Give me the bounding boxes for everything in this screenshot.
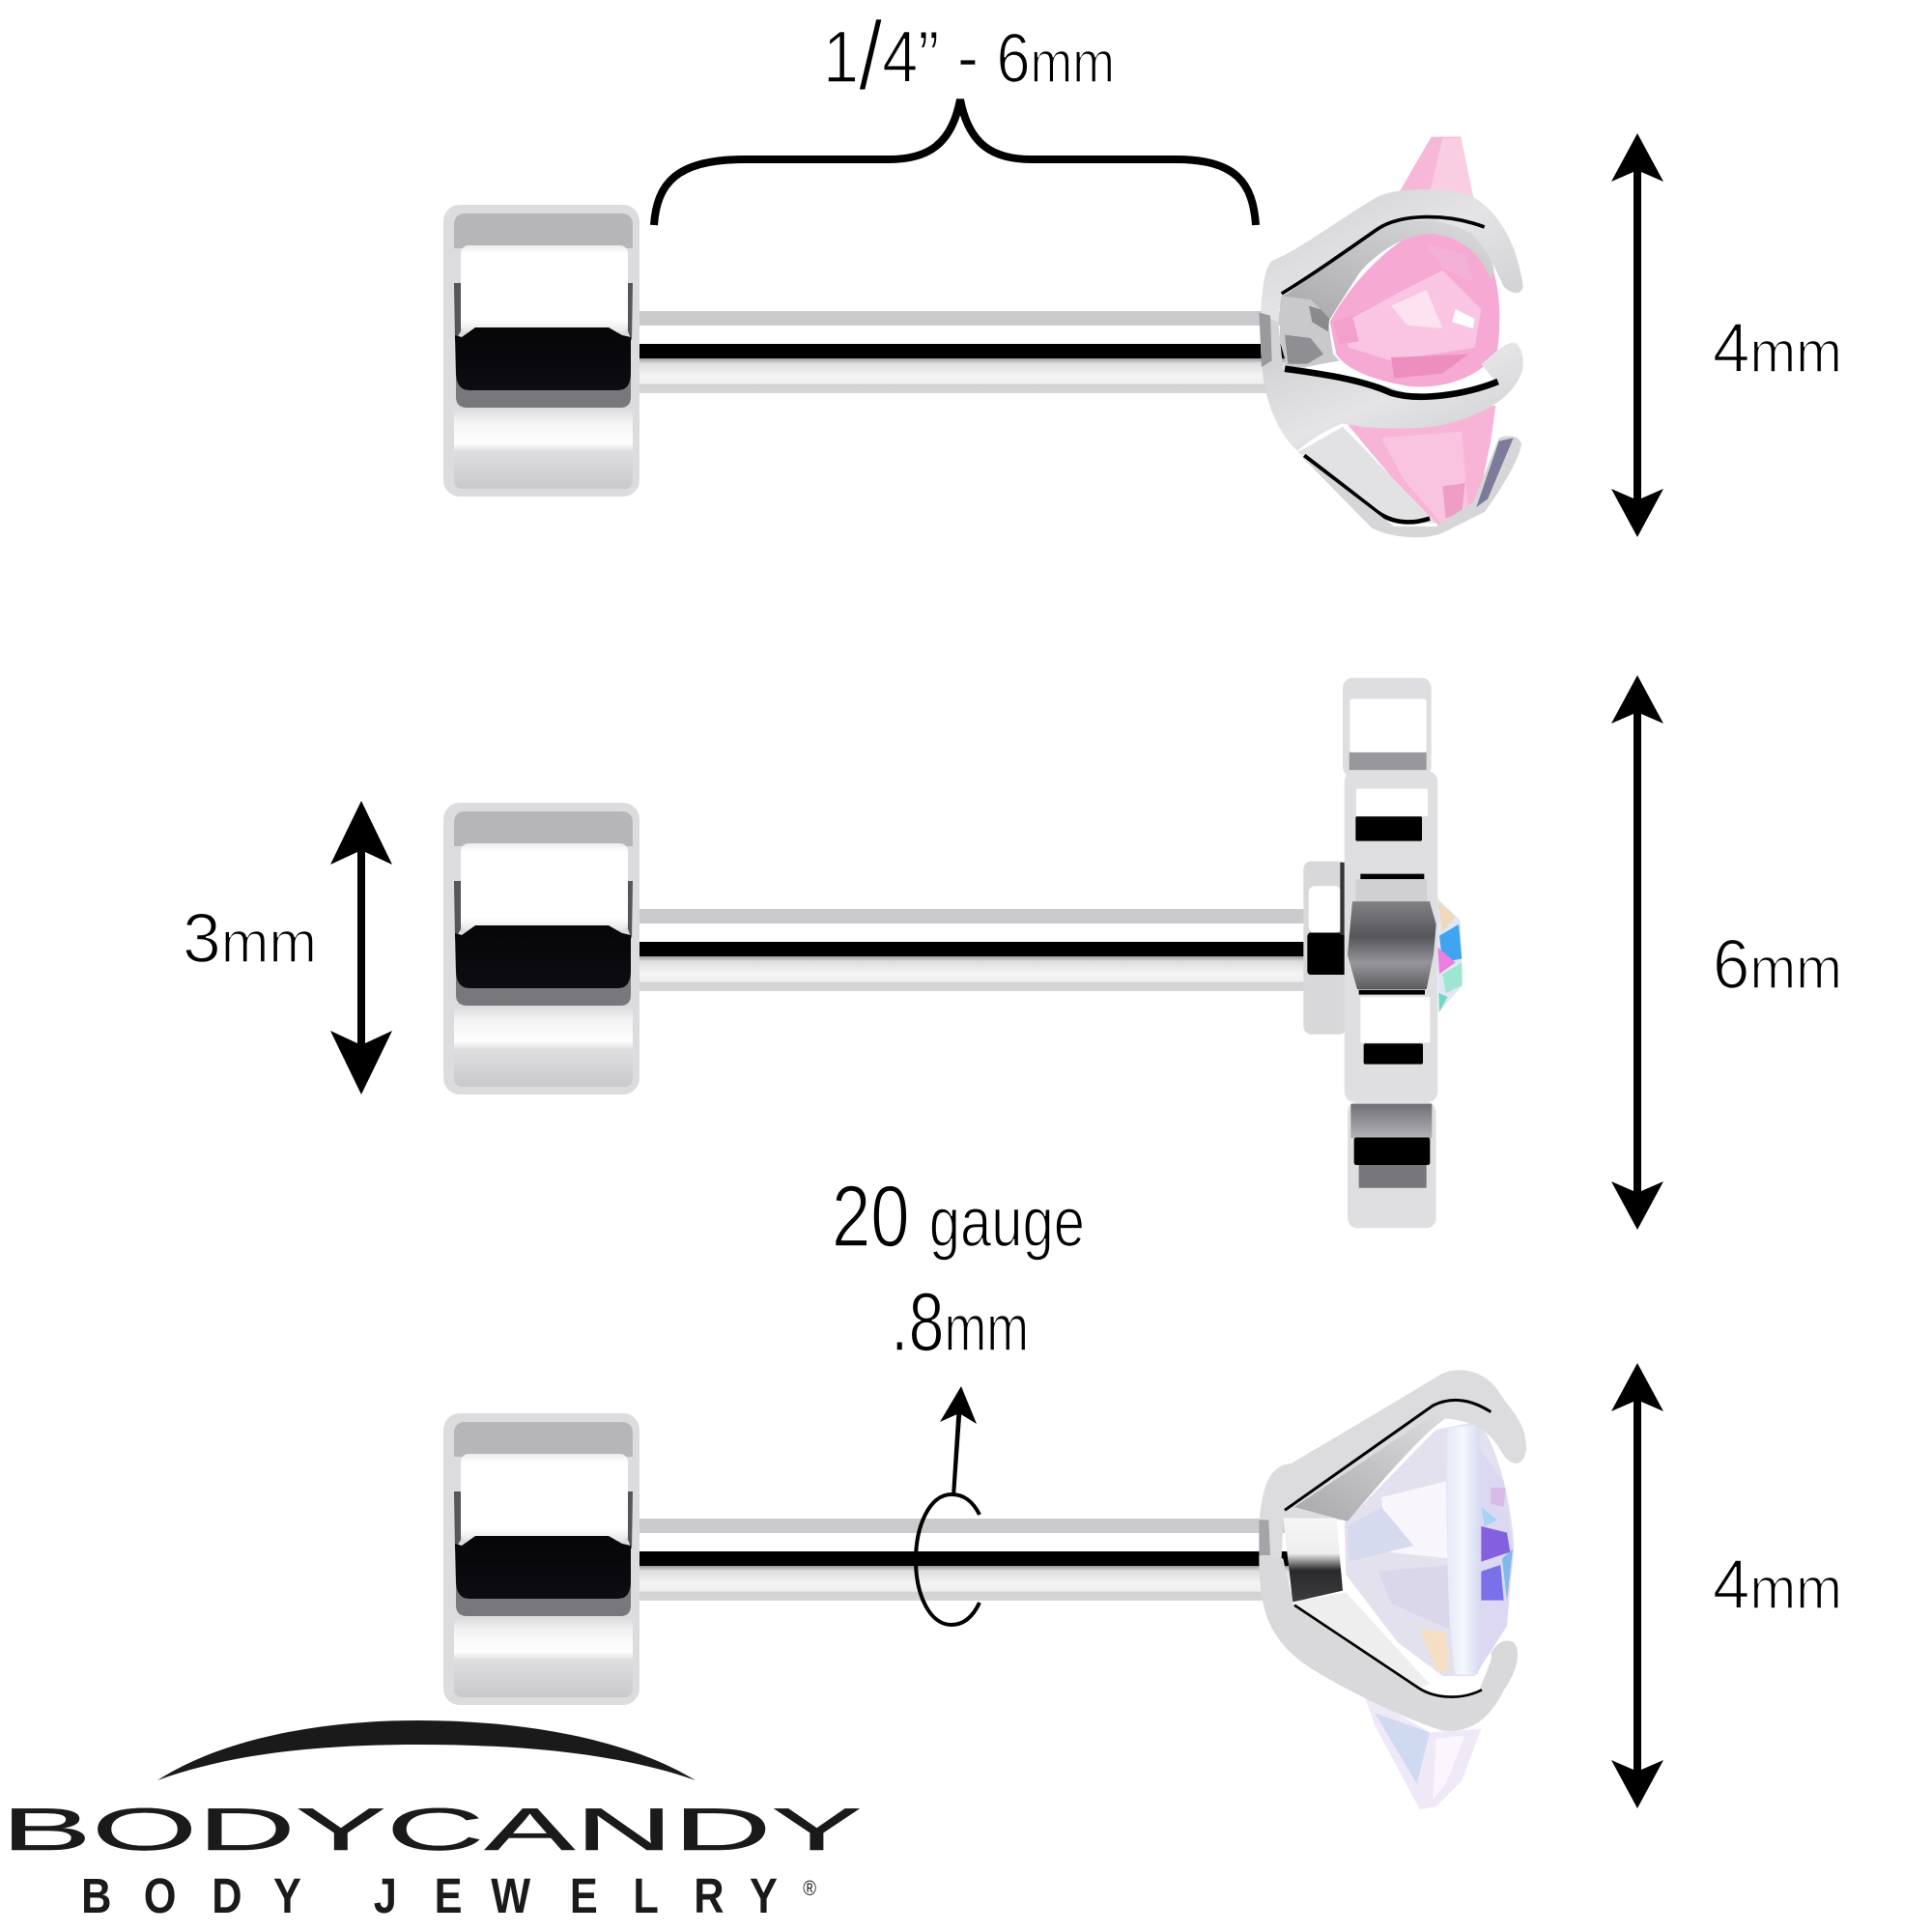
- length value: 1: [823, 16, 864, 99]
- dimension: bottom gem height: [1611, 1363, 1842, 1808]
- double arrow: [330, 801, 392, 1094]
- back disc: [443, 803, 639, 1094]
- dimension label: bar length: [654, 2, 1256, 225]
- value: 6mm: [1713, 926, 1842, 1004]
- dimension: flower height: [1611, 675, 1842, 1230]
- tagline: ®: [803, 1878, 816, 1900]
- dimension: back disc diameter: [183, 801, 392, 1094]
- value: 4mm: [1713, 310, 1842, 387]
- arrow from ring: [940, 1386, 977, 1496]
- dimension: gauge: [832, 1169, 1085, 1625]
- tagline: BODY: [81, 1869, 301, 1924]
- value: 3mm: [183, 900, 317, 978]
- millimetre value: .8mm: [891, 1276, 1029, 1369]
- double arrow: [1611, 133, 1663, 537]
- bar: [639, 909, 1306, 991]
- aurora gem in prong setting: [1259, 1370, 1526, 1809]
- value: 4mm: [1713, 1547, 1842, 1624]
- back disc: [443, 205, 639, 497]
- stud 1: pink gem barbell: [443, 137, 1523, 537]
- bar: [639, 1519, 1306, 1601]
- length value: /: [859, 2, 882, 110]
- logo swoosh: [157, 1720, 696, 1780]
- stud 3: aurora gem barbell: [443, 1370, 1526, 1809]
- pink gem in four prong setting: [1259, 137, 1523, 537]
- double arrow: [1611, 1363, 1663, 1808]
- dimension: top gem height: [1611, 133, 1842, 537]
- gauge value: 20 gauge: [832, 1169, 1085, 1265]
- ring around bar: [916, 1494, 980, 1625]
- length value: 4”: [882, 16, 939, 99]
- bar: [639, 311, 1306, 393]
- wordmark: BODYCANDY: [1, 1797, 862, 1863]
- stud 2: flower top barbell: [443, 678, 1463, 1228]
- tagline: JEWELRY: [374, 1869, 778, 1924]
- curly bracket: [654, 99, 1256, 225]
- length value: - 6mm: [960, 16, 1127, 99]
- flower top with aurora gem: [1303, 678, 1463, 1228]
- double arrow: [1611, 675, 1663, 1230]
- back disc: [443, 1413, 639, 1705]
- logo: Body Candy: [1, 1720, 862, 1924]
